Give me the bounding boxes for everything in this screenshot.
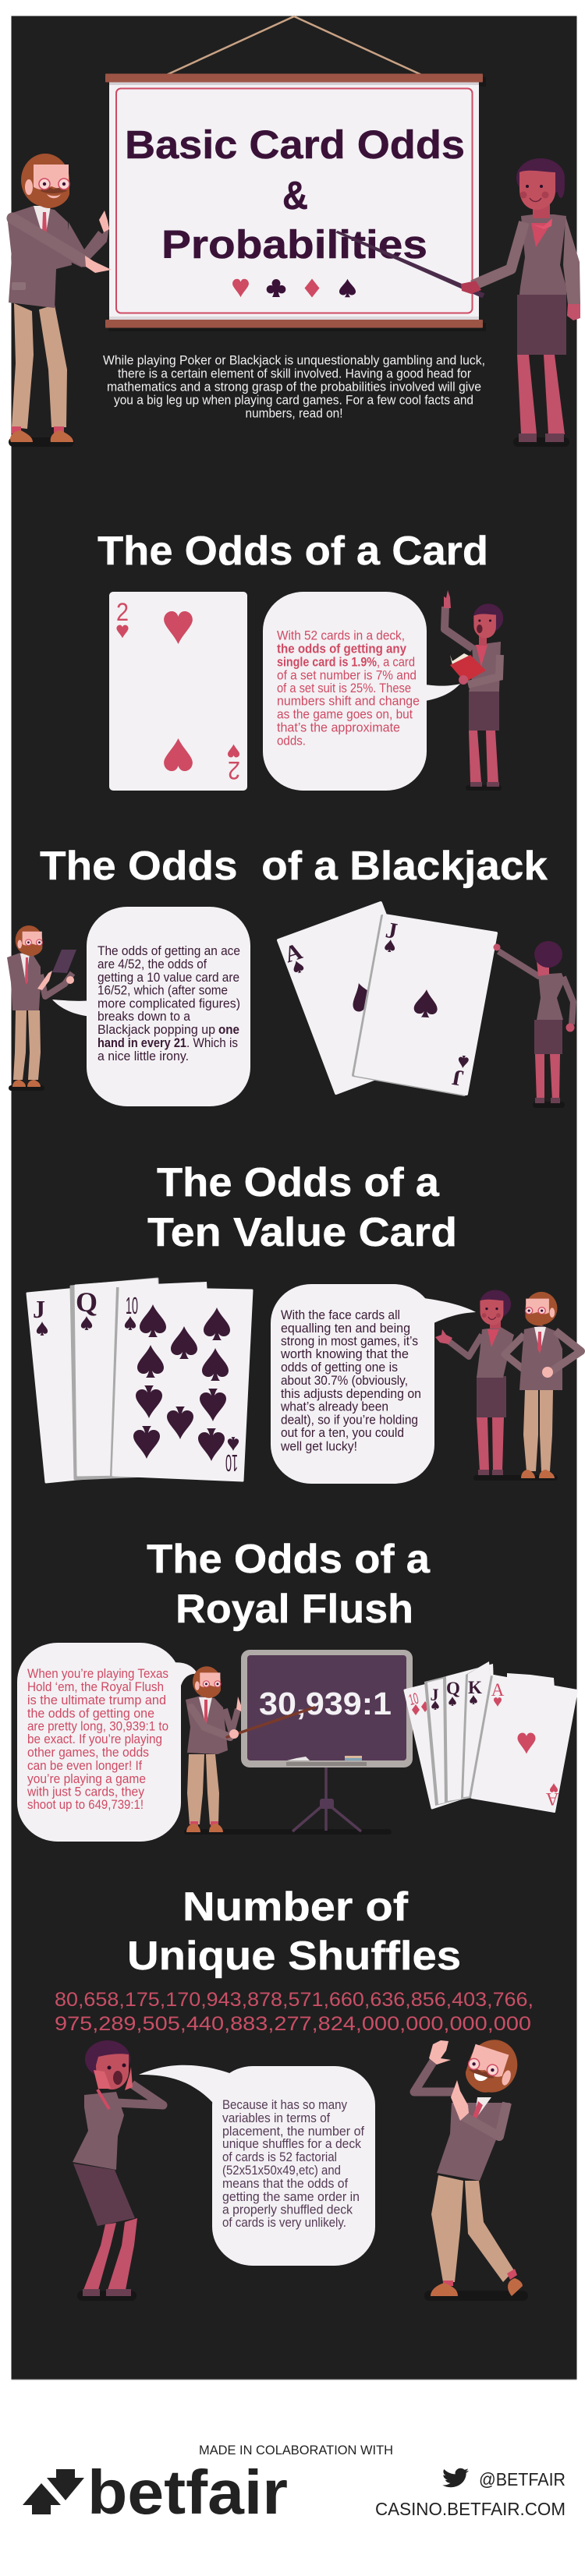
speech bubble: card odds bbox=[263, 592, 460, 791]
speech bubble: card odds: of a set number is 7% and bbox=[277, 669, 417, 683]
speech bubble: ten value card: odds of getting one is bbox=[281, 1361, 398, 1375]
speech bubble: unique shuffles: getting the same order in bbox=[222, 2190, 360, 2204]
heading: the odds of a ten value card: The Odds of a bbox=[157, 1160, 440, 1205]
speech bubble: royal flush: When you’re playing Texas bbox=[27, 1667, 168, 1681]
speech bubble: card odds: numbers shift and change bbox=[277, 694, 420, 708]
jack card bbox=[27, 1286, 117, 1482]
speech bubble: blackjack odds: getting a 10 value card are bbox=[98, 971, 239, 985]
ten card: 10 bbox=[126, 1292, 138, 1319]
king card: K bbox=[468, 1678, 482, 1697]
footer contacts: @BETFAIR bbox=[479, 2469, 566, 2489]
speech bubble: royal flush: be exact. If you’re playing bbox=[27, 1732, 162, 1746]
queen card: Q bbox=[76, 1286, 98, 1318]
speech bubble: unique shuffles: unique shuffles for a deck bbox=[222, 2137, 362, 2151]
icons: card suits bbox=[232, 279, 356, 298]
woman head bbox=[480, 1290, 511, 1325]
speech bubble: blackjack odds: a nice little irony. bbox=[98, 1049, 189, 1063]
footer contacts: CASINO.BETFAIR.COM bbox=[375, 2499, 566, 2519]
speech bubble: unique shuffles: of cards is 52 factorial bbox=[222, 2150, 337, 2164]
speech bubble: royal flush: with just 5 cards, they bbox=[27, 1785, 145, 1799]
figure: shocked man bbox=[414, 2033, 528, 2301]
big number: 80,658,175,170,943,878,571,660,636,856,403,766, bbox=[55, 1989, 534, 2011]
intro text: you a big leg up when playing card games. For a few cool facts and bbox=[114, 393, 473, 407]
speech bubble: blackjack odds: . Which is bbox=[186, 1036, 238, 1050]
man head bbox=[16, 925, 42, 956]
king card bbox=[463, 1661, 499, 1797]
ace card bbox=[278, 903, 438, 1093]
figure: shocked woman bbox=[73, 2040, 163, 2301]
playing cards: ace and jack of spades bbox=[278, 903, 496, 1095]
figure: woman seen from behind bbox=[493, 941, 574, 1108]
speech bubble: card odds: , a card bbox=[377, 655, 415, 669]
speech bubble: royal flush: Hold ‘em, the Royal Flush bbox=[27, 1680, 164, 1694]
speech bubble: blackjack odds: hand in every 21 bbox=[98, 1036, 186, 1050]
speech bubble: blackjack odds: breaks down to a bbox=[98, 1010, 191, 1024]
man head bbox=[21, 154, 69, 208]
intro text: numbers, read on! bbox=[245, 405, 343, 421]
speech bubble: ten value card: With the face cards all bbox=[281, 1308, 400, 1322]
figure: woman holding pointer bbox=[337, 158, 580, 447]
speech bubble: royal flush bbox=[17, 1643, 197, 1842]
chalkboard with odds: 30,939:1 bbox=[259, 1686, 392, 1721]
ace of hearts: A bbox=[545, 1789, 558, 1809]
speech bubble: card odds: odds. bbox=[277, 734, 306, 748]
playing card: two of hearts bbox=[109, 592, 247, 791]
jack card bbox=[356, 915, 496, 1094]
betfair logo: betfair bbox=[87, 2457, 288, 2527]
playing cards: royal flush fan bbox=[405, 1661, 577, 1812]
intro text: While playing Poker or Blackjack is unquestionably gambling and luck, bbox=[103, 352, 485, 368]
jack card: J bbox=[431, 1685, 438, 1704]
heading: the odds of a ten value card bbox=[147, 1160, 457, 1255]
jack card: J bbox=[450, 1064, 466, 1091]
man head bbox=[193, 1666, 221, 1698]
speech bubble: card odds: of a set suit is 25%. These bbox=[277, 681, 411, 695]
title: Probabilities bbox=[161, 222, 427, 267]
footer credit: MADE IN COLABORATION WITH bbox=[199, 2443, 393, 2457]
big number bbox=[55, 1989, 534, 2035]
intro text bbox=[103, 352, 485, 421]
speech bubble: card odds: as the game goes on, but bbox=[277, 708, 413, 722]
jack card bbox=[427, 1670, 485, 1804]
speech bubble: royal flush: other games, the odds bbox=[27, 1746, 149, 1760]
speech bubble: blackjack odds: one bbox=[218, 1023, 239, 1037]
speech bubble: unique shuffles bbox=[139, 2065, 375, 2266]
speech bubble: unique shuffles: a properly shuffled deck bbox=[222, 2203, 353, 2217]
speech bubble: unique shuffles: means that the odds of bbox=[222, 2177, 348, 2191]
intro text: there is a certain element of skill involved. Having a good head for bbox=[118, 366, 471, 380]
footer contacts bbox=[375, 2469, 566, 2519]
figure: man pointing at poster bbox=[8, 154, 112, 447]
speech bubble: royal flush: shoot up to 649,739:1! bbox=[27, 1798, 144, 1812]
speech bubble: card odds: single card is 1.9% bbox=[277, 655, 377, 669]
figure: woman with book bbox=[444, 590, 503, 791]
figure: man with tablet bbox=[7, 925, 76, 1091]
speech bubble: ten value card: this adjusts depending on bbox=[281, 1387, 421, 1401]
ten card: 10 bbox=[225, 1449, 238, 1477]
playing card: two of hearts: 2 bbox=[228, 756, 240, 784]
ace of hearts bbox=[472, 1675, 577, 1812]
speech bubble: card odds: that’s the approximate bbox=[277, 720, 400, 734]
jack card: J bbox=[33, 1295, 45, 1323]
speech bubble: unique shuffles: of cards is very unlikely. bbox=[222, 2216, 346, 2230]
speech bubble: ten value card: well get lucky! bbox=[280, 1439, 357, 1453]
speech bubble: blackjack odds bbox=[52, 907, 250, 1106]
jack card: J bbox=[384, 918, 399, 944]
heading: number of unique shuffles bbox=[127, 1884, 461, 1979]
speech bubble: ten value card bbox=[271, 1284, 476, 1484]
speech bubble: royal flush: are pretty long, 30,939:1 to bbox=[27, 1720, 168, 1734]
heading: the odds of a ten value card: Ten Value Card bbox=[147, 1210, 457, 1255]
heading: number of unique shuffles: Unique Shuffles bbox=[127, 1934, 461, 1979]
woman head bbox=[473, 603, 503, 638]
heading: the odds of a royal flush: The Odds of a bbox=[147, 1537, 431, 1582]
queen card bbox=[76, 1279, 164, 1475]
speech bubble: royal flush: is the ultimate trump and bbox=[27, 1693, 166, 1707]
chalkboard with odds bbox=[184, 1650, 413, 1835]
figures: woman and man standing together bbox=[435, 1290, 581, 1481]
speech bubble: ten value card: worth knowing that the bbox=[280, 1347, 409, 1361]
man head bbox=[461, 2033, 524, 2100]
heading: the odds of a royal flush: Royal Flush bbox=[176, 1587, 413, 1632]
speech bubble: ten value card: equalling ten and being bbox=[281, 1322, 410, 1336]
speech bubble: unique shuffles: placement, the number of bbox=[222, 2125, 364, 2139]
heading: the odds of a blackjack: The Odds of a Blackjack bbox=[40, 844, 548, 889]
ace card: A bbox=[282, 938, 306, 968]
speech bubble: ten value card: strong in most games, it’s bbox=[281, 1335, 418, 1349]
hanging poster bbox=[105, 16, 486, 331]
speech bubble: ten value card: dealt), so if you’re holding bbox=[281, 1413, 418, 1427]
title: Basic Card Odds bbox=[125, 122, 465, 167]
speech bubble: ten value card: about 30.7% (obviously, bbox=[281, 1374, 408, 1388]
speech bubble: unique shuffles: variables in terms of bbox=[222, 2111, 330, 2125]
woman head bbox=[85, 2040, 133, 2090]
playing cards: jack queen ten of spades bbox=[27, 1279, 252, 1482]
ace of hearts: A bbox=[491, 1680, 505, 1700]
speech bubble: blackjack odds: are 4/52, the odds of bbox=[98, 957, 207, 971]
queen card: Q bbox=[446, 1679, 460, 1698]
queen card bbox=[446, 1664, 498, 1801]
speech bubble: unique shuffles: Because it has so many bbox=[222, 2098, 348, 2112]
speech bubble: blackjack odds: The odds of getting an ace bbox=[98, 944, 240, 958]
ten card bbox=[113, 1288, 252, 1481]
heading: the odds of a royal flush bbox=[147, 1537, 431, 1632]
man head bbox=[526, 1292, 557, 1325]
ten card: 10 bbox=[407, 1690, 420, 1709]
icon: twitter bird bbox=[442, 2468, 469, 2487]
speech bubble: blackjack odds: more complicated figures) bbox=[98, 996, 240, 1010]
woman head bbox=[516, 158, 565, 210]
speech bubble: blackjack odds: 16/52, which (after some bbox=[98, 984, 228, 998]
playing card: two of hearts: 2 bbox=[116, 598, 129, 626]
speech bubble: card odds: With 52 cards in a deck, bbox=[277, 628, 405, 642]
speech bubble: ten value card: what’s already been bbox=[280, 1400, 388, 1414]
speech bubble: royal flush: the odds of getting one bbox=[27, 1707, 154, 1721]
speech bubble: ten value card: out for a ten, you could bbox=[281, 1426, 404, 1440]
ten card bbox=[405, 1675, 477, 1808]
speech bubble: card odds: the odds of getting any bbox=[277, 642, 407, 656]
heading: number of unique shuffles: Number of bbox=[183, 1884, 409, 1930]
big number: 975,289,505,440,883,277,824,000,000,000,000 bbox=[55, 2013, 531, 2035]
figure: man pointing at chalkboard bbox=[186, 1666, 314, 1832]
intro text: mathematics and a strong grasp of the probabilities involved will give bbox=[107, 379, 481, 395]
title: & bbox=[282, 173, 308, 218]
heading: the odds of a card: The Odds of a Card bbox=[98, 529, 488, 574]
speech bubble: unique shuffles: (52x51x50x49,etc) and bbox=[222, 2164, 341, 2178]
title bbox=[125, 122, 465, 267]
speech bubble: royal flush: you’re playing a game bbox=[27, 1772, 146, 1786]
wooden pointer bbox=[227, 1707, 314, 1737]
speech bubble: blackjack odds: Blackjack popping up bbox=[98, 1023, 215, 1037]
speech bubble: royal flush: can be even longer! If bbox=[27, 1759, 142, 1773]
